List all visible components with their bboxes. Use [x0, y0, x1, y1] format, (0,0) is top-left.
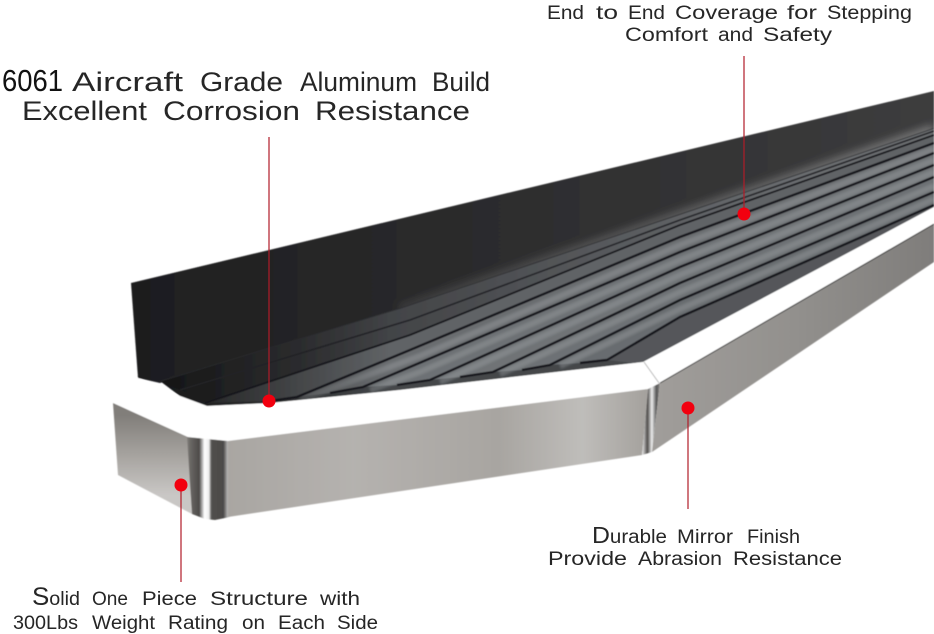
- rim edge lines: [660, 224, 934, 383]
- heading: 6061 aircraft grade aluminum: Corrosion: [163, 96, 300, 126]
- heading: end to end coverage: Safety: [763, 25, 833, 46]
- heading: durable mirror finish: Resistance: [733, 549, 842, 570]
- callout line and dot: one piece structure: [174, 478, 188, 582]
- running board product illustration: [113, 91, 934, 520]
- heading: 6061 aircraft grade aluminum: 6061: [2, 63, 63, 98]
- heading: solid one piece structure: with: [319, 589, 360, 610]
- left end face: [113, 403, 192, 514]
- heading: durable mirror finish: Abrasion: [638, 549, 722, 570]
- heading: end to end coverage: Coverage: [675, 3, 778, 24]
- heading: 6061 aircraft grade aluminum: Aluminum: [300, 67, 417, 97]
- heading: 6061 aircraft grade aluminum: Build: [432, 67, 490, 97]
- callout line and dot: mirror finish: [682, 402, 694, 509]
- callout line and dot: end to end coverage: [738, 56, 750, 220]
- heading: durable mirror finish: Durable: [592, 522, 667, 548]
- long side mirror face: [652, 224, 934, 452]
- back wall of the board: [131, 91, 934, 383]
- heading: end to end coverage: to: [596, 3, 618, 24]
- front corner chrome strip: [187, 437, 230, 520]
- heading: solid one piece structure: Side: [337, 613, 378, 634]
- heading: end to end coverage: End: [547, 3, 584, 24]
- front mirror face: [228, 389, 648, 517]
- heading: solid one piece structure: Rating: [168, 613, 228, 634]
- heading: durable mirror finish: Mirror: [677, 527, 734, 548]
- heading: solid one piece structure: One: [92, 589, 128, 610]
- heading: solid one piece structure: [13, 583, 378, 634]
- heading: solid one piece structure: Solid: [32, 583, 80, 611]
- heading: end to end coverage: End: [628, 3, 665, 24]
- heading: 6061 aircraft grade aluminum: Excellent: [22, 96, 148, 126]
- heading: 6061 aircraft grade aluminum: Grade: [200, 67, 283, 97]
- heading: solid one piece structure: Structure: [210, 589, 308, 610]
- heading: solid one piece structure: Weight: [92, 613, 156, 634]
- heading: durable mirror finish: Finish: [747, 527, 800, 548]
- right corner chrome strip: [642, 383, 660, 455]
- heading: durable mirror finish: Provide: [548, 549, 627, 570]
- heading: durable mirror finish: [548, 522, 842, 570]
- heading: 6061 aircraft grade aluminum: [2, 63, 490, 126]
- heading: solid one piece structure: Piece: [142, 589, 197, 610]
- heading: 6061 aircraft grade aluminum: Resistance: [315, 96, 470, 126]
- heading: end to end coverage: and: [718, 25, 753, 46]
- heading: end to end coverage: [547, 3, 912, 46]
- heading: solid one piece structure: Each: [278, 613, 325, 634]
- rim corner crease: [644, 362, 659, 383]
- heading: end to end coverage: Stepping: [827, 3, 912, 24]
- heading: end to end coverage: Comfort: [625, 25, 709, 46]
- white polished top rim: [113, 207, 934, 441]
- ribbed step floor: [150, 120, 934, 420]
- heading: 6061 aircraft grade aluminum: Aircraft: [72, 67, 184, 97]
- heading: solid one piece structure: on: [242, 613, 265, 634]
- callout line and dot: aluminum build: [262, 137, 276, 408]
- heading: end to end coverage: for: [787, 3, 818, 24]
- heading: solid one piece structure: 300Lbs: [13, 613, 78, 634]
